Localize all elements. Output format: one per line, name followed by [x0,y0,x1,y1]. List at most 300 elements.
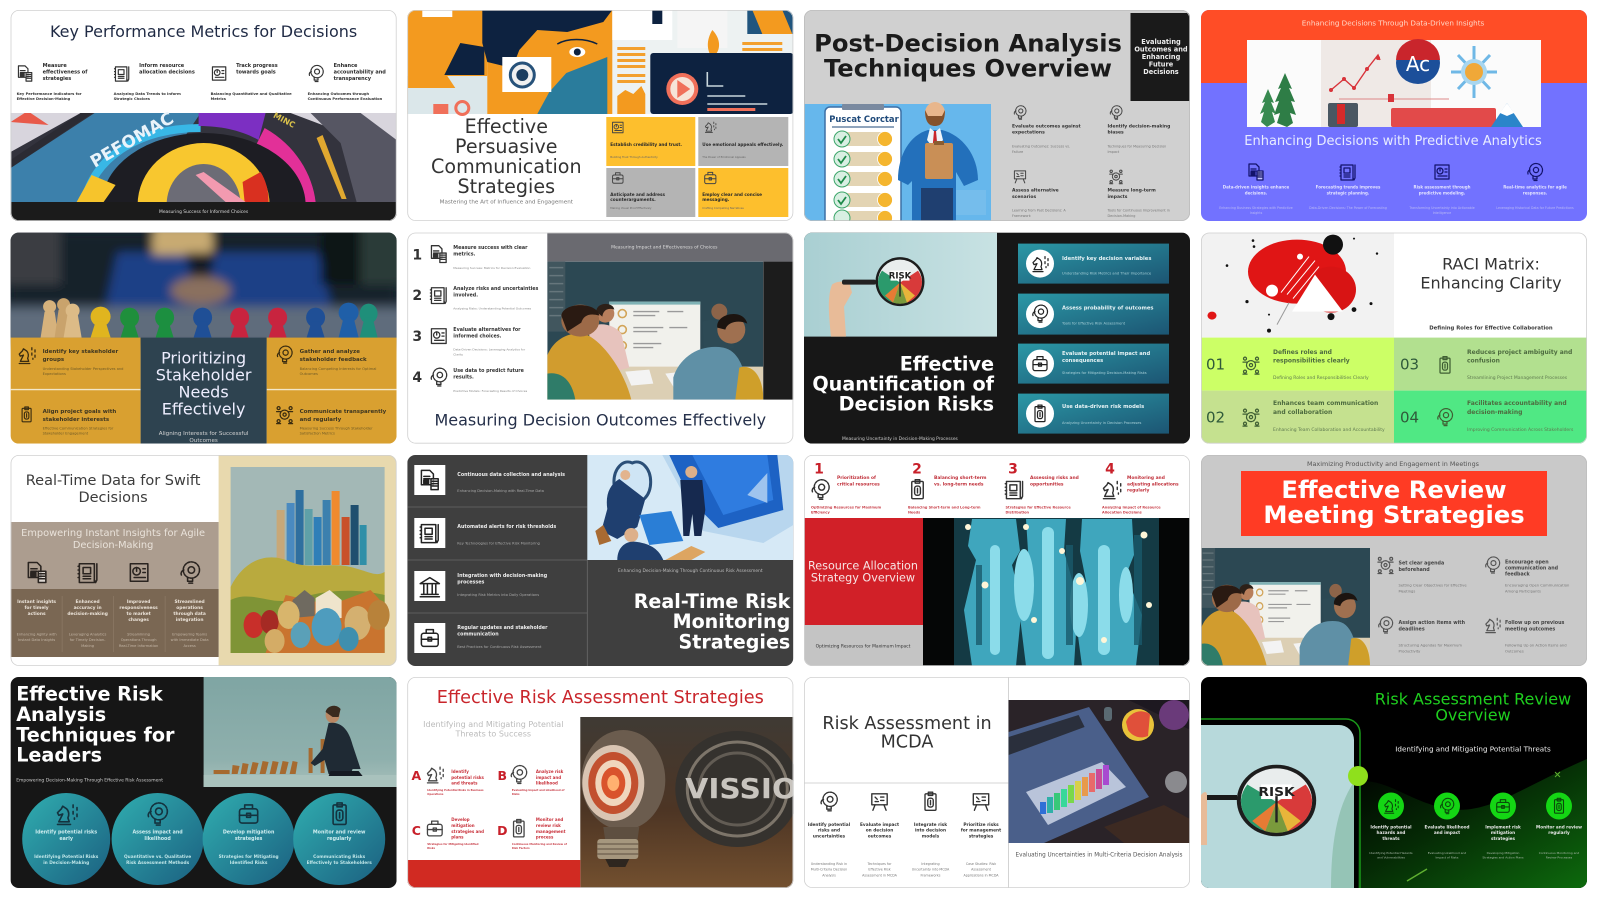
stakeholder items [19,346,387,436]
stakeholder items: groups [43,357,65,363]
numbered items: 3 [1008,462,1018,478]
slide: quantification of decision risks [804,233,1190,444]
stakeholder items: Satisfaction Metrics [300,432,335,436]
technique circles: Identify potential risks [35,830,97,836]
technique circles: Effectively to Stakeholders [307,860,372,866]
mcda items: Multi-Criteria Decision [811,868,847,872]
analysis items: Evaluating Outcomes: Success vs. [1012,144,1070,148]
mcda items: Case Studies: Risk [966,862,996,866]
mcda items: Techniques for [867,862,892,866]
title: Decisions [78,490,148,506]
strategy items: impact and [536,775,561,780]
mcda items: Identify potential [808,822,851,828]
slide: risk assessment review [1200,677,1587,888]
RACI grid: 01 [1206,356,1225,374]
side box: Future [1149,60,1174,68]
review steps: and Vulnerabilities [1377,856,1405,860]
analytics items: Data-Driven Decisions: The Power of Forecasting [1309,206,1387,210]
domino image [204,677,397,787]
stakeholder items: stakeholder feedback [300,357,367,363]
RACI grid: Streamlining Project Management Processes [1467,375,1568,381]
analytics items: Enhancing Business Strategies with Predictive [1219,206,1293,210]
analytics image [1247,39,1541,127]
mcda items: Assessment [971,868,992,872]
risk panels: Assess probability of outcomes [1062,306,1153,312]
mcda items: Evaluate impact [860,822,899,828]
data columns: Access [183,644,196,648]
title: Overview [1435,706,1511,724]
numbered items: regularly [1127,488,1150,494]
data columns: to market [126,611,151,617]
monitoring list: Best Practices for Continuous Risk Assessment [457,645,542,649]
metric items: Enhancing Outcomes through [308,92,370,96]
data columns: with Immediate Data [171,638,209,642]
review steps: mitigation [1491,830,1515,835]
numbered items: Monitoring and [1127,475,1165,481]
risk panels: consequences [1062,358,1103,364]
strategy items: Operations [427,792,444,796]
mcda items: Integrate risk [914,822,947,828]
title: Techniques Overview [824,54,1112,82]
numbered items: Balancing short-term [934,475,987,481]
RACI grid: 04 [1400,409,1419,427]
strategy items: Continuous Monitoring and Review of [512,842,568,846]
meeting items: Assign action items with [1398,620,1466,626]
title: RACI Matrix: [1442,255,1540,274]
data columns: Improved [127,599,150,605]
analytics items: responses. [1523,190,1548,196]
RACI grid: Defining Roles and Responsibilities Clearly [1273,375,1369,381]
metric items: towards goals [236,70,276,76]
slide: real-time risk monitoring [407,455,793,666]
meeting image [1201,548,1370,666]
tile grid: Establish credibility and trust. [610,142,682,147]
mcda items: for management [961,828,1001,834]
metric items: transparency [334,76,372,82]
technique circles: Assess impact and [132,830,183,836]
subtitle: Identifying and Mitigating Potential Threats [1395,744,1551,754]
numbered items: Strategies for Effective Resource [1006,506,1071,510]
numbered list: Clarity [453,353,463,357]
stakeholder items: Understanding Stakeholder Perspectives and [43,367,123,371]
left panel [11,338,141,444]
strategy items: potential risks [451,775,485,780]
data columns: Operations Through [121,638,157,642]
analysis items: Decision-Making [1108,214,1135,218]
strategy items: Analyze risk [536,769,564,774]
tile grid: The Power of Emotional Appeals [701,155,746,159]
numbered items: Balancing Short-term and Long-term [908,506,981,510]
analytics items: Forecasting trends improves [1316,184,1381,190]
slide: risk analysis techniques [11,677,397,888]
meeting items: Encouraging Open Communication [1505,584,1570,588]
mcda items: outcomes [868,834,892,840]
data columns: decision-making [67,611,108,617]
analytics items: predictive modeling. [1419,190,1466,196]
strategy items: Risks [512,792,520,796]
strategy items: strategies and [451,829,484,834]
numbered list: Use data to predict future [453,368,525,374]
risk monitor image [587,455,793,560]
RACI grid: Enhancing Team Collaboration and Accountability [1273,427,1385,433]
center panel with title: Needs [179,383,229,402]
meeting image [547,262,793,400]
review steps: Impact of Risks [1436,856,1459,860]
data columns: for Timely Decision- [70,638,106,642]
numbered list: Measure success with clear [453,245,528,251]
title: Effective Risk [16,682,164,706]
title: Quantification of [812,373,995,396]
analysis items: Tools for Continuous Improvement in [1106,208,1170,212]
numbered list: Data-Driven Decisions: Leveraging Analytics for [453,348,526,352]
metric items [17,63,386,101]
tile grid: Crafting Compelling Narratives [702,206,744,210]
data columns: Streamlined [174,599,205,605]
title panel: Resource Allocation [808,560,918,572]
risk panels: Strategies for Mitigating Decision-Making Risks [1062,371,1147,375]
center panel with title: Effectively [162,400,245,419]
metric items: Inform resource [139,63,185,69]
strategy items: Develop [451,817,470,822]
side box: Enhancing [1142,53,1181,61]
mcda items: risks and [818,828,840,834]
tile grid: Employ clear and concise [702,192,762,197]
analytics items: Insights [1250,211,1263,215]
center panel with title: Stakeholder [156,366,252,385]
mcda items: on decision [866,828,893,834]
strategy items: A [411,768,421,783]
data columns [11,589,219,657]
strategy items: Evaluating Impact and Likelihood of [512,788,565,792]
numbered list: metrics. [453,252,476,258]
side box [1130,13,1190,101]
RACI grid: responsibilities clearly [1273,358,1350,365]
tablet image [1009,700,1191,843]
numbered items: Allocation Decisions [1102,510,1142,514]
metric items: Continuous Performance Evaluation [308,97,383,101]
monitoring list: Integrating Risk Metrics into Daily Operations [457,593,539,597]
numbered items: 2 [912,462,922,478]
caption panel [804,625,923,666]
analytics items [1219,164,1574,215]
meeting items: deadlines [1398,626,1425,632]
light bulb image: VISSIO [685,772,797,805]
meeting items [1378,557,1570,654]
title: Decision Risks [839,393,994,416]
stakeholder items: stakeholder interests [43,417,110,423]
monitoring list: Integration with decision-making [457,573,548,579]
caption panel: Optimizing Resources for Maximum Impact [816,644,911,650]
review steps: Identify potential [1370,824,1412,830]
mcda items: uncertainties [813,834,846,840]
RACI grid: decision-making [1467,409,1522,416]
technique circles: in Decision-Making [43,860,89,866]
center panel with title: Prioritizing [161,349,246,368]
abstract red image [1201,233,1394,338]
meeting items: Structuring Agendas for Maximum [1398,644,1462,648]
RACI grid: 02 [1206,409,1225,427]
data columns: Real-Time Information [119,644,158,648]
title: Risk Assessment Review [1375,690,1571,708]
subtitle: Measuring Uncertainty in Decision-Making Processes [842,436,959,442]
header caption: Measuring Impact and Effectiveness of Choices [611,245,718,251]
data columns: integration [176,617,203,623]
subtitle band [11,522,219,589]
center panel with title: Outcomes [189,438,218,444]
gauge image: PEFOMAC [87,109,177,172]
technique circles: likelihood [144,836,171,842]
analysis items: biases [1108,130,1124,136]
RACI grid: Facilitates accountability and [1467,400,1567,407]
stakeholder items: Communicate transparently [300,409,387,415]
title: Strategies [458,175,555,198]
checklist illustration [804,102,991,221]
caption: Maximizing Productivity and Engagement in Meetings [1307,460,1480,468]
RACI grid: Improving Communication Across Stakeholders [1467,427,1574,433]
meeting items: Encourage open [1505,560,1549,566]
metric items: Effective Decision-Making [17,97,71,101]
technique circles: Strategies for Mitigating [219,854,279,860]
mcda items: Frameworks [921,874,941,878]
analytics items: Leveraging Historical Data for Future Predictions [1496,206,1574,210]
caption bar: Measuring Success for Informed Choices [159,209,249,215]
title panel: Strategy Overview [811,572,915,584]
mcda items: strategies [969,834,994,840]
metric items: Analyzing Data Trends to Inform [114,92,181,96]
review steps: threats [1382,836,1400,841]
landscape chart image [231,467,390,653]
tile grid: Use emotional appeals effectively. [702,142,784,147]
title: Real-Time Data for Swift [26,473,201,489]
meeting items: Among Participants [1505,590,1541,594]
RACI grid: 03 [1400,356,1419,374]
monitoring list: Continuous data collection and analysis [457,472,565,478]
review steps: strategies [1491,836,1515,841]
title: Key Performance Metrics for Decisions [50,22,357,41]
slide: stakeholder needs [1,225,411,444]
mcda items: Analysis [822,874,836,878]
slide: RACI matrix [1201,233,1587,444]
strategy items: likelihood [536,780,558,786]
meeting items: Follow up on previous [1505,620,1564,626]
slide: persuasive communication [407,10,793,221]
analysis items: Assess alternative [1012,188,1059,194]
side box: Decisions [1143,68,1179,76]
RACI grid: Reduces project ambiguity and [1467,349,1572,356]
slide: resource allocation [804,455,1190,666]
meeting items: beforehand [1398,567,1430,573]
technique circles: early [59,836,74,842]
numbered items: Needs [908,510,920,514]
data columns: through data [173,611,206,617]
tile grid [606,117,788,217]
title: Post-Decision Analysis [814,30,1122,58]
review steps: Strategies and Action Plans [1482,856,1524,860]
slide: key performance metrics [10,10,397,221]
tile grid: messaging. [702,197,730,202]
illustration [407,10,793,116]
strategy items: Risks [427,846,435,850]
title: Persuasive [455,135,558,158]
risk panels: Evaluate potential impact and [1062,351,1150,357]
review steps: Developing Mitigation [1487,851,1520,855]
stakeholder items: Balancing Competing Interests for Optimal [300,367,376,371]
numbered items: 4 [1105,462,1115,478]
title: Enhancing Decisions with Predictive Analytics [1244,134,1542,149]
technique circles: Risk Assessment Methods [126,860,190,866]
title panel [804,518,923,625]
technique circles: Monitor and review [313,830,366,836]
caption: Enhancing Decisions Through Data-Driven Insights [1302,18,1485,28]
analytics items: Real-time analytics for agile [1503,184,1567,190]
review steps: hazards and [1377,830,1405,835]
data columns: Empowering Teams [172,632,207,636]
glass bottles image [923,518,1190,666]
meeting items: Meetings [1398,590,1415,594]
stakeholder items: Stakeholder Engagement [43,432,89,436]
mcda items: Uncertainty into MCDA [912,868,950,872]
analysis items: Framework [1012,214,1031,218]
data columns: Instant Data Insights [18,638,55,642]
technique circles: Develop mitigation [223,830,275,836]
technique circles: regularly [327,836,352,842]
data columns: Streamlining [127,632,150,636]
analytics items: Data-driven insights enhance [1223,184,1290,190]
strategy items: review risk [536,823,561,828]
caption bar [11,202,397,221]
analysis items: Techniques for Measuring Decision [1106,144,1166,148]
meeting items: Following Up on Action Items and [1505,644,1567,648]
strategy items: Identify [451,769,469,774]
monitoring list [414,465,565,653]
review steps [1369,792,1582,860]
strategy items: management [536,829,566,834]
analytics items: Intelligence [1433,211,1451,215]
title: Enhancing Clarity [1420,274,1562,293]
review steps: Monitor and review [1536,824,1582,830]
metric items: Key Performance Indicators for [17,92,82,96]
analytics items: Risk assessment through [1414,184,1471,190]
analysis items: Learning from Past Decisions: A [1012,208,1066,212]
analytics items: Transforming Uncertainty into Actionable [1408,206,1475,210]
metric items: Strategic Choices [114,97,151,101]
review steps: and impact [1434,830,1460,835]
strategy items: Strategies for Mitigating Identified [427,842,479,846]
review steps: Review Processes [1546,856,1573,860]
subtitle: Mastering the Art of Influence and Engagement [440,200,574,206]
red bar [407,860,580,888]
analysis items: expectations [1012,130,1045,136]
analytics items: decisions. [1245,190,1268,196]
numbered items: Analyzing Impact of Resource [1102,506,1161,510]
caption: Enhancing Decision-Making Through Continuous Risk Assessment [618,568,763,574]
analysis items: scenarios [1012,194,1036,200]
title: Techniques for [16,724,175,746]
meeting items: Productivity [1398,650,1421,654]
tile grid: counterarguments. [610,197,656,202]
technique circles: strategies [235,836,262,842]
analysis items: Failure [1012,150,1023,154]
title box: Effective Review [1281,476,1507,504]
data columns: Leveraging Analytics [69,632,106,636]
stakeholder items: Identify key stakeholder [43,349,118,355]
meeting items: Outcomes [1505,650,1524,654]
mcda items: Prioritize risks [963,822,999,828]
numbered list: 4 [412,370,422,386]
subtitle: Identifying and Mitigating Potential [423,720,563,729]
title: Leaders [16,744,102,766]
strategy items: and threats [451,780,478,786]
slide: measuring decision outcomes [407,233,793,444]
strategy items: C [412,823,421,838]
data columns: Making [81,644,94,648]
slide: predictive analytics [1201,10,1587,221]
stakeholder items: Gather and analyze [300,349,360,355]
stakeholder items: Outcomes [300,372,318,376]
metric items: strategies [43,76,71,82]
review steps: Implement risk [1485,824,1521,830]
strategy items: plans [451,834,464,840]
RACI grid: confusion [1467,358,1500,365]
strategy items: Monitor and [536,817,563,822]
gauge image: MINC [272,111,297,130]
monitoring list: Key Technologies for Effective Risk Monitoring [457,542,540,546]
analysis items: Evaluate outcomes against [1012,124,1082,130]
technique circles: Identified Risks [230,860,268,866]
numbered list: Analyze risks and uncertainties [453,286,539,292]
slide: risk assessment strategies [407,677,799,888]
title: Analysis [16,703,106,726]
mcda items: Applications in MCDA [963,874,999,878]
risk panels: Identify key decision variables [1062,256,1151,262]
metric items: Balancing Quantitative and Qualitative [211,92,292,96]
numbered list: involved. [453,293,478,299]
subtitle: Empowering Decision-Making Through Effective Risk Assessment [16,778,163,784]
analytics items: strategic planning. [1327,190,1370,196]
risk panels: Tools for Effective Risk Assessment [1061,322,1126,326]
title: Risk Assessment in [822,714,992,734]
slide: real-time data [11,455,397,666]
caption: Evaluating Uncertainties in Multi-Criteria Decision Analysis [1016,852,1182,858]
RACI grid: and collaboration [1273,409,1332,416]
stakeholder items: Expectations [43,372,66,376]
center panel with title: Aligning Interests for Successful [159,431,249,437]
magnifier panel [1200,719,1368,888]
numbered items: vs. long-term needs [934,482,984,488]
strategy items: B [498,768,507,783]
RACI grid [1201,338,1587,444]
analytics image: Ac [1406,52,1430,76]
mcda items: Understanding Risk in [811,862,847,866]
metric items: accountability and [334,70,386,76]
numbered items [811,462,1179,514]
review steps: regularly [1548,830,1570,835]
risk panels: Analyzing Uncertainty in Decision Processes [1062,421,1141,425]
monitoring list: Enhancing Decision-Making with Real-Time Data [457,489,544,493]
title: Strategies [679,630,790,654]
risk panels [1018,244,1169,434]
RACI grid: Enhances team communication [1273,400,1378,407]
data columns: actions [28,611,46,617]
data columns: Enhanced [76,599,100,605]
analysis items: Measure long-term [1108,188,1156,194]
metric items: Track progress [236,63,278,69]
title box: Meeting Strategies [1263,501,1525,529]
gauge image [10,112,397,202]
mcda items [808,792,1001,878]
numbered list [412,245,539,393]
metric items: Measure [43,63,67,69]
